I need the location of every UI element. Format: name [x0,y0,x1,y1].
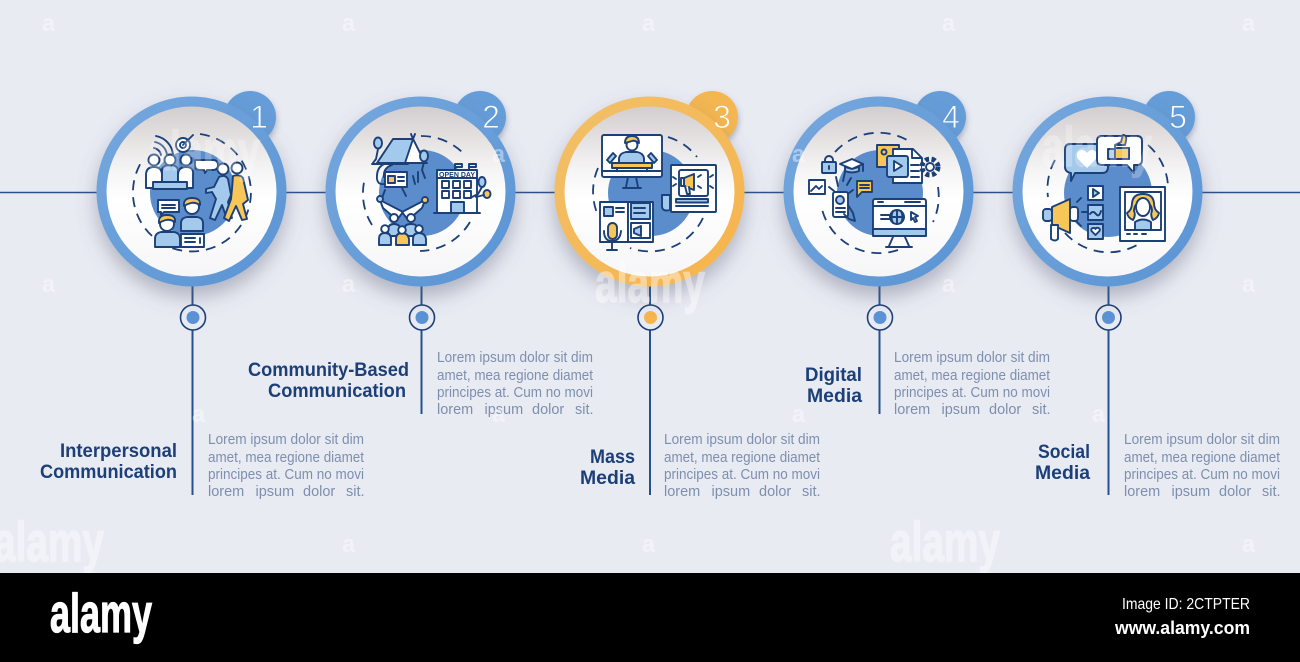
heading 5: Social [1038,441,1090,463]
body text 2 [437,350,594,418]
number 5: 5 [1169,99,1187,135]
watermarks: a [192,401,206,428]
body text 5: ipsum [1172,484,1210,500]
body text 3: Lorem ipsum dolor sit dim [664,432,820,448]
body text 4: ipsum [942,402,980,418]
body text 4: amet, mea regione diamet [894,368,1050,384]
watermarks: a [642,531,656,558]
watermarks: alamy [148,119,260,182]
body text 2: Lorem ipsum dolor sit dim [437,350,593,366]
watermarks: a [1242,271,1256,298]
body text 3: lorem [664,484,700,500]
body text 3: sit. [802,484,821,500]
icon: mass media [600,135,716,250]
body text 5: dolor [1219,484,1251,500]
body text 2: ipsum [484,402,523,418]
heading 1: Interpersonal [60,440,177,462]
watermarks: alamy [595,251,705,314]
heading 4 [805,364,862,407]
heading 2 [248,359,409,402]
heading 4: Media [807,385,862,407]
heading 2: Community-Based [248,359,409,381]
connector and node 4 [868,285,892,414]
number badge 5 [1143,91,1195,143]
heading 2: Communication [268,380,406,402]
body text 2: amet, mea regione diamet [437,368,593,384]
number 3: 3 [713,99,731,135]
footer logo: alamy [50,582,152,644]
body text 4: Lorem ipsum dolor sit dim [894,350,1050,366]
watermarks: a [1242,10,1256,37]
watermarks: alamy [890,510,1000,573]
connector and node 2 [410,285,434,414]
heading 1: Communication [40,461,177,483]
number 2: 2 [482,99,500,135]
body text 4: principes at. Cum no movi [894,385,1050,401]
watermarks: a [342,10,356,37]
footer bar [0,573,1300,662]
body text 2: sit. [575,402,594,418]
body text 4: dolor [989,402,1021,418]
heading 5 [1035,441,1090,484]
watermarks: a [342,531,356,558]
heading 3 [580,446,635,489]
horizontal timeline [0,192,1300,194]
number badge 4 [914,91,966,143]
watermarks: alamy [1042,115,1152,178]
icon: community events [372,134,490,245]
watermarks: a [342,271,356,298]
watermarks: a [42,271,56,298]
watermarks: a [792,401,806,428]
number badge 2 [454,91,506,143]
body text 5: Lorem ipsum dolor sit dim [1124,432,1280,448]
body text 3 [664,432,821,500]
circle frame 4 [784,96,974,286]
heading 3: Media [580,467,635,489]
body text 2: lorem [437,402,473,418]
image id: Image ID: 2CTPTER [1122,596,1250,613]
watermarks: a [642,10,656,37]
circle frame 2 [326,96,516,286]
number 4: 4 [942,99,960,135]
number 1: 1 [250,99,268,135]
body text 5: sit. [1262,484,1281,500]
circle frame 5 [1012,96,1202,286]
body text 2: dolor [532,402,564,418]
body text 1 [208,432,365,500]
body text 5 [1124,432,1281,500]
body text 1: sit. [346,484,365,500]
watermarks: a [942,10,956,37]
step 2: Community-Based Communication [248,91,594,418]
heading 1 [40,440,177,483]
number badge 1 [224,91,276,143]
watermarks: a [42,10,56,37]
body text 4: sit. [1032,402,1051,418]
watermarks: a [1092,401,1106,428]
circle frame 1 [96,96,286,286]
body text 1: principes at. Cum no movi [208,467,364,483]
connector and node 5 [1096,285,1121,495]
heading 4: Digital [805,364,862,386]
body text 3: amet, mea regione diamet [664,450,820,466]
watermarks: a [942,271,956,298]
connector and node 1 [180,285,206,495]
body text 4: lorem [894,402,930,418]
body text 3: dolor [759,484,791,500]
icon: social media [1043,135,1165,241]
body text 5: lorem [1124,484,1160,500]
watermarks: a [492,401,506,428]
step 3: Mass Media [554,91,821,500]
website: www.alamy.com [1114,618,1250,638]
body text 5: principes at. Cum no movi [1124,467,1280,483]
body text 1: Lorem ipsum dolor sit dim [208,432,364,448]
step 4: Digital Media [784,91,1051,418]
heading 5: Media [1035,462,1090,484]
body text 2: principes at. Cum no movi [437,385,593,401]
body text 1: dolor [303,484,335,500]
body text 1: ipsum [256,484,294,500]
connector and node 3 [638,285,663,495]
number badge 3 [686,91,738,143]
step 5: Social Media [1012,91,1281,500]
body text 4 [894,350,1051,418]
icon: people communicating [146,135,248,247]
icon: digital media [809,145,938,247]
icon: community events: OPEN DAY [439,172,475,179]
body text 3: ipsum [712,484,750,500]
body text 5: amet, mea regione diamet [1124,450,1280,466]
body text 1: lorem [208,484,244,500]
heading 3: Mass [590,446,635,468]
circle frame 3 [554,96,744,286]
body text 3: principes at. Cum no movi [664,467,820,483]
watermarks: a [1242,531,1256,558]
body text 1: amet, mea regione diamet [208,450,364,466]
step 1: Interpersonal Communication [40,91,365,500]
watermarks: a [492,141,506,168]
watermarks: a [792,141,806,168]
